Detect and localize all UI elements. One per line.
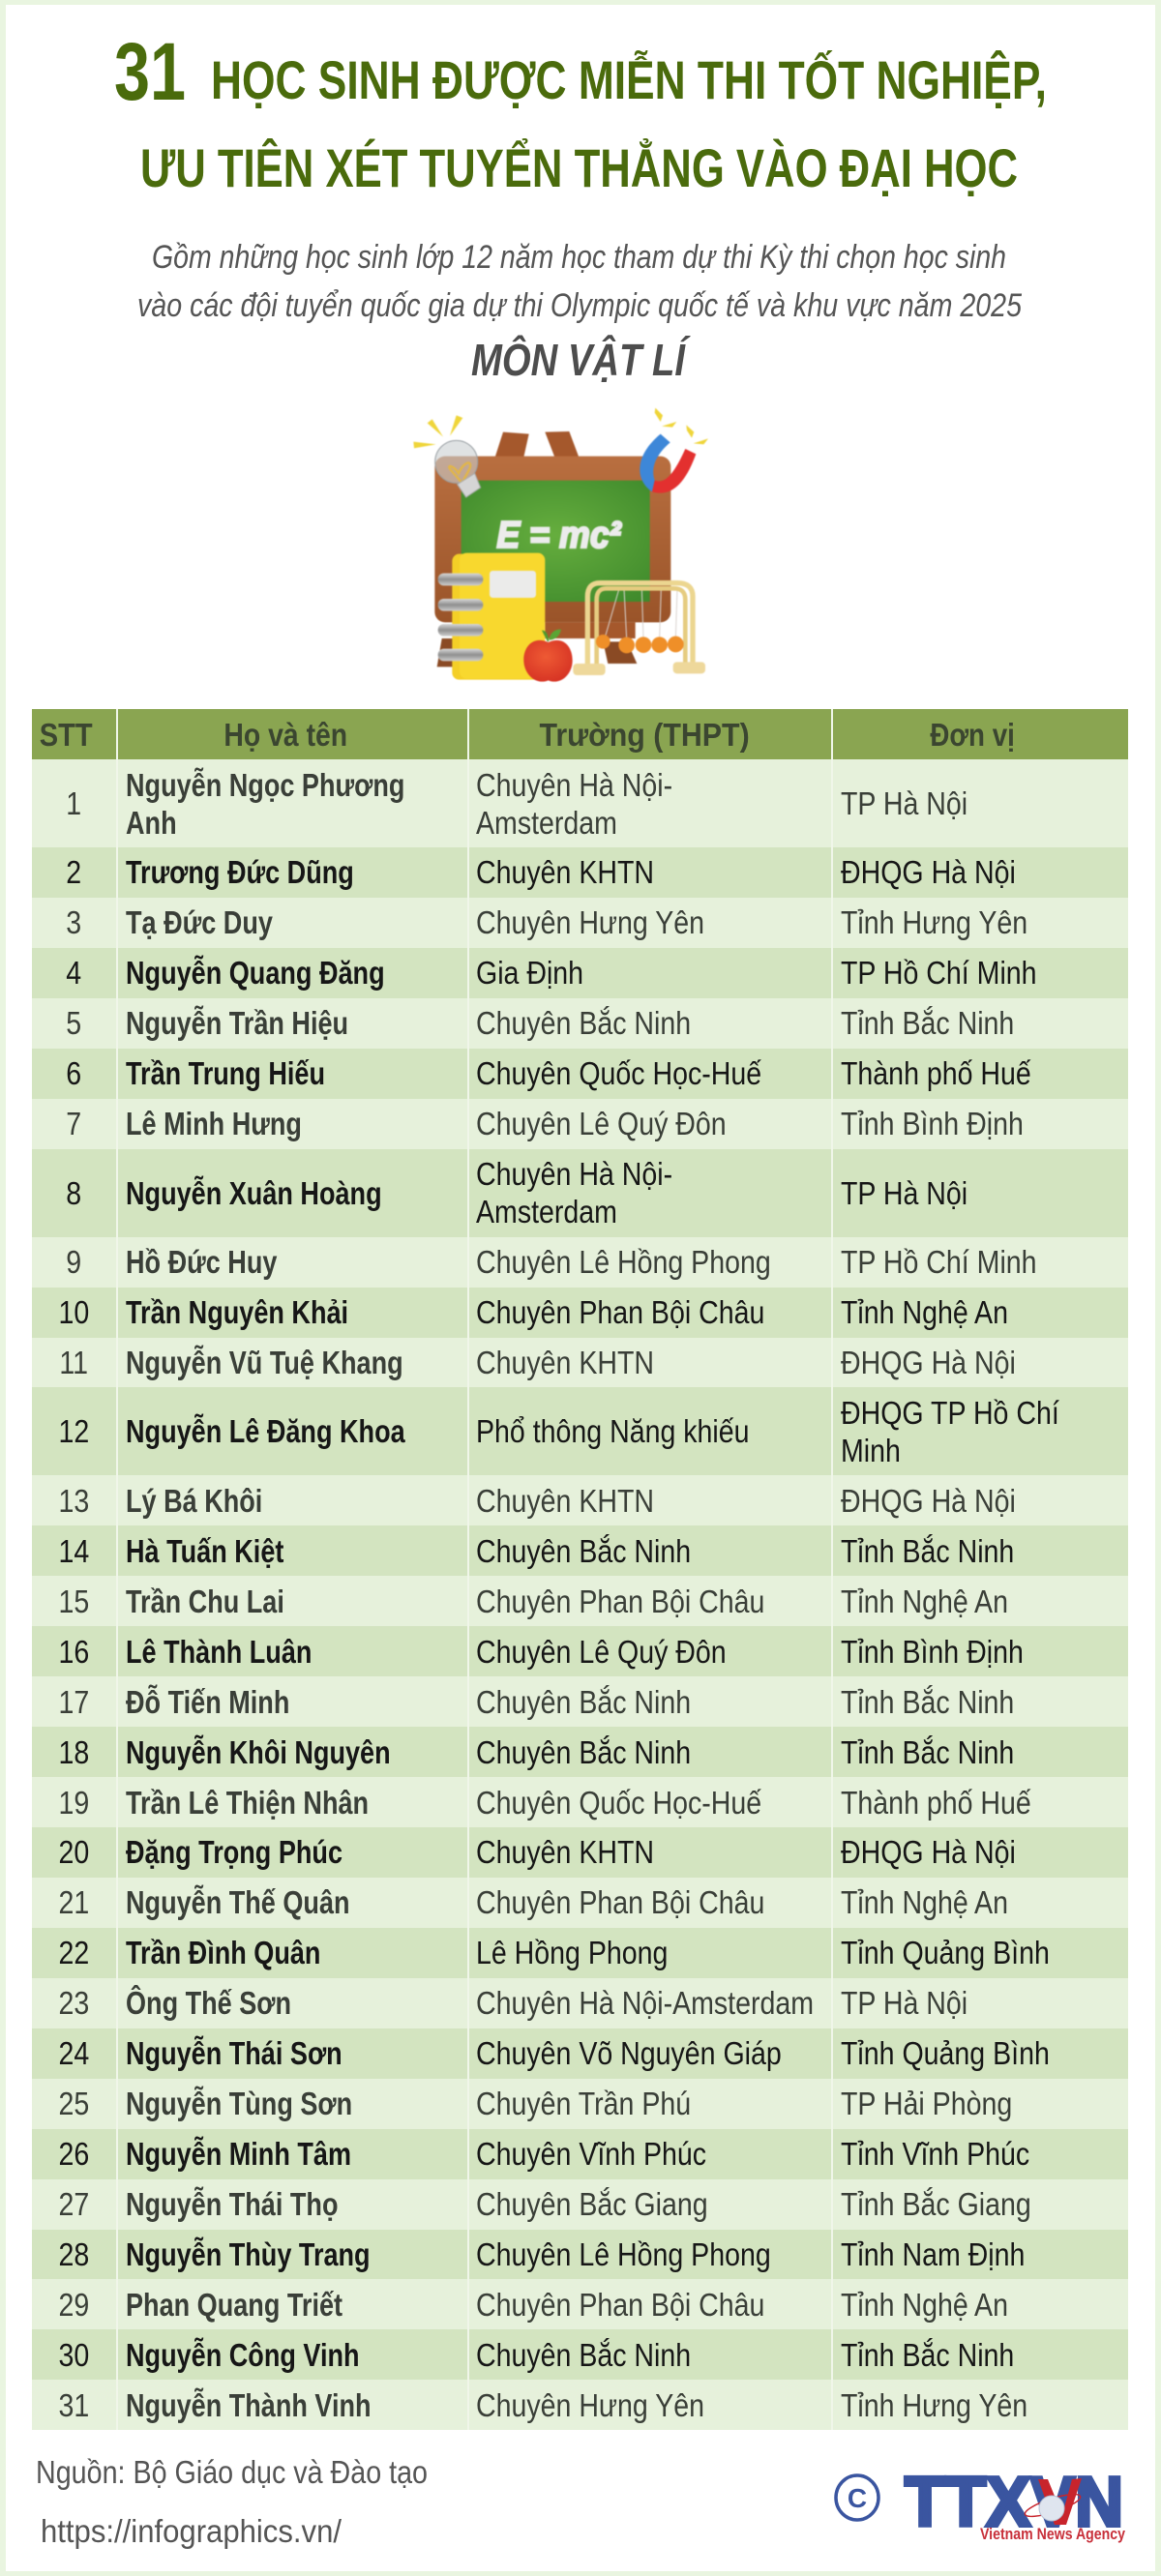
row 24: Tỉnh Quảng Bình: [841, 2035, 1050, 2071]
row 3: 3: [67, 904, 81, 940]
row 26: [32, 2129, 1128, 2179]
row 9: Chuyên Lê Hồng Phong: [476, 1244, 771, 1280]
row 27: 27: [59, 2186, 89, 2222]
row 21: Tỉnh Nghệ An: [841, 1884, 1008, 1920]
row 16: Tỉnh Bình Định: [841, 1634, 1024, 1670]
subtitle: vào các đội tuyển quốc gia dự thi Olympic quốc tế và khu vực năm 2025: [137, 287, 1022, 324]
row 20: [32, 1827, 1128, 1878]
row 21: [32, 1878, 1128, 1928]
row 12: Minh: [841, 1433, 901, 1468]
row 29: Chuyên Phan Bội Châu: [476, 2287, 764, 2323]
row 28: Tỉnh Nam Định: [841, 2236, 1025, 2272]
row 1: Nguyễn Ngọc Phương: [126, 766, 404, 803]
row 12: ĐHQG TP Hồ Chí: [841, 1395, 1059, 1431]
row 2: ĐHQG Hà Nội: [841, 854, 1016, 890]
row 8: [32, 1149, 1128, 1237]
row 13: [32, 1475, 1128, 1525]
row 30: [32, 2329, 1128, 2380]
row 15: Trần Chu Lai: [126, 1584, 284, 1619]
row 4: Nguyễn Quang Đăng: [126, 955, 385, 991]
row 23: [32, 1978, 1128, 2028]
row 8: TP Hà Nội: [841, 1175, 968, 1211]
row 27: Chuyên Bắc Giang: [476, 2186, 708, 2222]
table header: STT: [40, 716, 93, 753]
row 10: [32, 1288, 1128, 1337]
row 3: Tỉnh Hưng Yên: [841, 904, 1027, 940]
row 12: [32, 1387, 1128, 1475]
row 5: Tỉnh Bắc Ninh: [841, 1005, 1014, 1041]
row 27: Tỉnh Bắc Giang: [841, 2186, 1031, 2222]
row 24: Chuyên Võ Nguyên Giáp: [476, 2035, 782, 2071]
row 23: Ông Thế Sơn: [126, 1985, 291, 2021]
table header: Trường (THPT): [539, 716, 750, 753]
row 20: Chuyên KHTN: [476, 1834, 654, 1870]
row 19: Trần Lê Thiện Nhân: [126, 1785, 369, 1821]
row 3: Chuyên Hưng Yên: [476, 904, 704, 940]
row 26: Tỉnh Vĩnh Phúc: [841, 2136, 1029, 2172]
row 7: Lê Minh Hưng: [126, 1106, 302, 1141]
row 4: [32, 948, 1128, 998]
subtitle: Gồm những học sinh lớp 12 năm học tham dự thi Kỳ thi chọn học sinh: [152, 239, 1006, 276]
row 14: [32, 1525, 1128, 1576]
row 31: Tỉnh Hưng Yên: [841, 2387, 1027, 2423]
row 27: [32, 2179, 1128, 2229]
row 10: Tỉnh Nghệ An: [841, 1294, 1008, 1330]
row 23: 23: [59, 1985, 89, 2021]
row 10: Chuyên Phan Bội Châu: [476, 1294, 764, 1330]
row 26: Chuyên Vĩnh Phúc: [476, 2136, 706, 2172]
row 5: 5: [67, 1005, 81, 1041]
row 13: Lý Bá Khôi: [126, 1483, 262, 1519]
row 24: 24: [59, 2035, 89, 2071]
row 20: Đặng Trọng Phúc: [126, 1834, 342, 1870]
row 22: 22: [59, 1935, 89, 1970]
apple: [523, 630, 573, 682]
board frame: [434, 457, 670, 622]
row 29: Tỉnh Nghệ An: [841, 2287, 1008, 2323]
row 1: [32, 759, 1128, 847]
row 6: Chuyên Quốc Học-Huế: [476, 1055, 761, 1091]
row 12: 12: [59, 1413, 89, 1449]
sparks: [655, 408, 708, 444]
row 11: Chuyên KHTN: [476, 1345, 654, 1380]
logo: TTXVN: C: [848, 2483, 867, 2513]
row 18: Chuyên Bắc Ninh: [476, 1734, 691, 1770]
row 28: Nguyễn Thùy Trang: [126, 2236, 371, 2272]
row 21: 21: [59, 1884, 89, 1920]
row 5: [32, 998, 1128, 1049]
row 6: 6: [67, 1055, 81, 1091]
row 29: [32, 2279, 1128, 2329]
row 14: Hà Tuấn Kiệt: [126, 1533, 283, 1569]
row 23: TP Hà Nội: [841, 1985, 968, 2021]
row 17: 17: [59, 1684, 89, 1720]
row 30: Tỉnh Bắc Ninh: [841, 2337, 1014, 2373]
row 28: Chuyên Lê Hồng Phong: [476, 2236, 771, 2272]
green board: [461, 481, 650, 602]
magnet: [640, 434, 696, 493]
row 8: Nguyễn Xuân Hoàng: [126, 1175, 382, 1211]
row 9: [32, 1237, 1128, 1288]
row 27: Nguyễn Thái Thọ: [126, 2186, 338, 2222]
row 6: Thành phố Huế: [841, 1055, 1031, 1091]
row 6: [32, 1049, 1128, 1099]
row 16: Lê Thành Luân: [126, 1634, 312, 1670]
row 11: 11: [60, 1345, 88, 1380]
table header: Đơn vị: [931, 716, 1015, 753]
row 16: Chuyên Lê Quý Đôn: [476, 1634, 727, 1670]
row 11: Nguyễn Vũ Tuệ Khang: [126, 1345, 403, 1380]
row 28: [32, 2229, 1128, 2279]
row 4: Gia Định: [476, 955, 583, 991]
row 31: Nguyễn Thành Vinh: [126, 2387, 372, 2423]
row 4: TP Hồ Chí Minh: [841, 955, 1037, 991]
row 21: Nguyễn Thế Quân: [126, 1884, 350, 1920]
row 25: Nguyễn Tùng Sơn: [126, 2086, 352, 2121]
row 17: Đỗ Tiến Minh: [126, 1684, 289, 1720]
row 29: Phan Quang Triết: [126, 2287, 342, 2323]
row 25: [32, 2079, 1128, 2129]
row 18: 18: [59, 1734, 89, 1770]
logo: TTXVN: Vietnam News Agency: [980, 2525, 1125, 2543]
row 13: 13: [59, 1483, 89, 1519]
row 12: Nguyễn Lê Đăng Khoa: [126, 1413, 405, 1449]
row 1: TP Hà Nội: [841, 785, 968, 821]
notebook: [438, 553, 545, 680]
row 22: [32, 1928, 1128, 1978]
row 31: 31: [59, 2387, 89, 2423]
row 25: Chuyên Trần Phú: [476, 2086, 691, 2121]
illustration: physics blackboard: [412, 407, 708, 683]
row 22: Tỉnh Quảng Bình: [841, 1935, 1050, 1970]
row 5: Nguyễn Trần Hiệu: [126, 1005, 348, 1041]
row 9: 9: [67, 1244, 81, 1280]
row 17: [32, 1676, 1128, 1727]
footer: [36, 2454, 1125, 2549]
row 7: Chuyên Lê Quý Đôn: [476, 1106, 727, 1141]
row 5: Chuyên Bắc Ninh: [476, 1005, 691, 1041]
table: list of 31 students: [32, 709, 1128, 2430]
row 18: Nguyễn Khôi Nguyên: [126, 1734, 391, 1770]
row 9: TP Hồ Chí Minh: [841, 1244, 1037, 1280]
table header: [32, 709, 1128, 759]
row 21: Chuyên Phan Bội Châu: [476, 1884, 764, 1920]
row 24: [32, 2028, 1128, 2079]
row 18: Tỉnh Bắc Ninh: [841, 1734, 1014, 1770]
subtitle: [137, 239, 1022, 324]
row 28: 28: [59, 2236, 89, 2272]
row 16: [32, 1626, 1128, 1676]
row 30: 30: [59, 2337, 89, 2373]
row 3: [32, 898, 1128, 948]
light bulb: [413, 415, 481, 497]
row 26: Nguyễn Minh Tâm: [126, 2136, 351, 2172]
row 22: Trần Đình Quân: [126, 1935, 320, 1970]
formula: E = mc²: [496, 515, 622, 556]
row 19: Thành phố Huế: [841, 1785, 1031, 1821]
row 2: 2: [67, 854, 81, 890]
row 15: [32, 1576, 1128, 1626]
row 30: Chuyên Bắc Ninh: [476, 2337, 691, 2373]
row 9: Hồ Đức Huy: [126, 1244, 277, 1280]
row 17: Chuyên Bắc Ninh: [476, 1684, 691, 1720]
row 14: 14: [59, 1533, 89, 1569]
row 26: 26: [59, 2136, 89, 2172]
row 23: Chuyên Hà Nội-Amsterdam: [476, 1985, 814, 2021]
row 16: 16: [59, 1634, 89, 1670]
subject heading: MÔN VẬT LÍ: [471, 335, 691, 385]
row 6: Trần Trung Hiếu: [126, 1055, 325, 1091]
row 25: 25: [59, 2086, 89, 2121]
row 30: Nguyễn Công Vinh: [126, 2337, 360, 2373]
row 8: Chuyên Hà Nội-: [476, 1156, 672, 1192]
row 2: Trương Đức Dũng: [126, 854, 354, 890]
row 12: Phổ thông Năng khiếu: [476, 1413, 750, 1449]
row 1: Chuyên Hà Nội-: [476, 766, 672, 803]
row 19: 19: [59, 1785, 89, 1821]
row 1: 1: [67, 785, 81, 821]
row 7: Tỉnh Bình Định: [841, 1106, 1024, 1141]
header text block: [114, 26, 1047, 385]
title line 1: [114, 26, 1047, 117]
easel legs: [437, 431, 637, 666]
row 14: Chuyên Bắc Ninh: [476, 1533, 691, 1569]
row 17: Tỉnh Bắc Ninh: [841, 1684, 1014, 1720]
row 10: 10: [59, 1294, 89, 1330]
source note: Nguồn: Bộ Giáo dục và Đào tạo: [36, 2454, 428, 2490]
row 11: [32, 1337, 1128, 1387]
row 20: 20: [59, 1834, 89, 1870]
row 19: [32, 1777, 1128, 1827]
row 7: 7: [67, 1106, 81, 1141]
row 7: [32, 1099, 1128, 1149]
row 8: Amsterdam: [476, 1194, 617, 1229]
logo: TTXVN: TTXVN: [905, 2464, 1123, 2541]
row 18: [32, 1727, 1128, 1777]
row 13: Chuyên KHTN: [476, 1483, 654, 1519]
row 31: Chuyên Hưng Yên: [476, 2387, 704, 2423]
row 19: Chuyên Quốc Học-Huế: [476, 1785, 761, 1821]
row 22: Lê Hồng Phong: [476, 1935, 668, 1970]
row 25: TP Hải Phòng: [841, 2086, 1012, 2121]
row 20: ĐHQG Hà Nội: [841, 1834, 1016, 1870]
row 15: 15: [59, 1584, 89, 1619]
row 10: Trần Nguyên Khải: [126, 1294, 348, 1330]
row 2: [32, 847, 1128, 898]
row 14: Tỉnh Bắc Ninh: [841, 1533, 1014, 1569]
website url: https://infographics.vn/: [41, 2513, 342, 2549]
row 13: ĐHQG Hà Nội: [841, 1483, 1016, 1519]
row 11: ĐHQG Hà Nội: [841, 1345, 1016, 1380]
table header: Họ và tên: [224, 716, 347, 753]
row 15: Chuyên Phan Bội Châu: [476, 1584, 764, 1619]
row 29: 29: [59, 2287, 89, 2323]
row 24: Nguyễn Thái Sơn: [126, 2035, 342, 2071]
row 3: Tạ Đức Duy: [126, 904, 273, 940]
row 4: 4: [67, 955, 81, 991]
row 1: Anh: [126, 805, 177, 840]
row 8: 8: [67, 1175, 81, 1211]
row 2: Chuyên KHTN: [476, 854, 654, 890]
title line 1: 31: [114, 26, 186, 117]
row 15: Tỉnh Nghệ An: [841, 1584, 1008, 1619]
row 1: Amsterdam: [476, 805, 617, 840]
row 31: [32, 2380, 1128, 2430]
newton's cradle: [573, 583, 705, 675]
